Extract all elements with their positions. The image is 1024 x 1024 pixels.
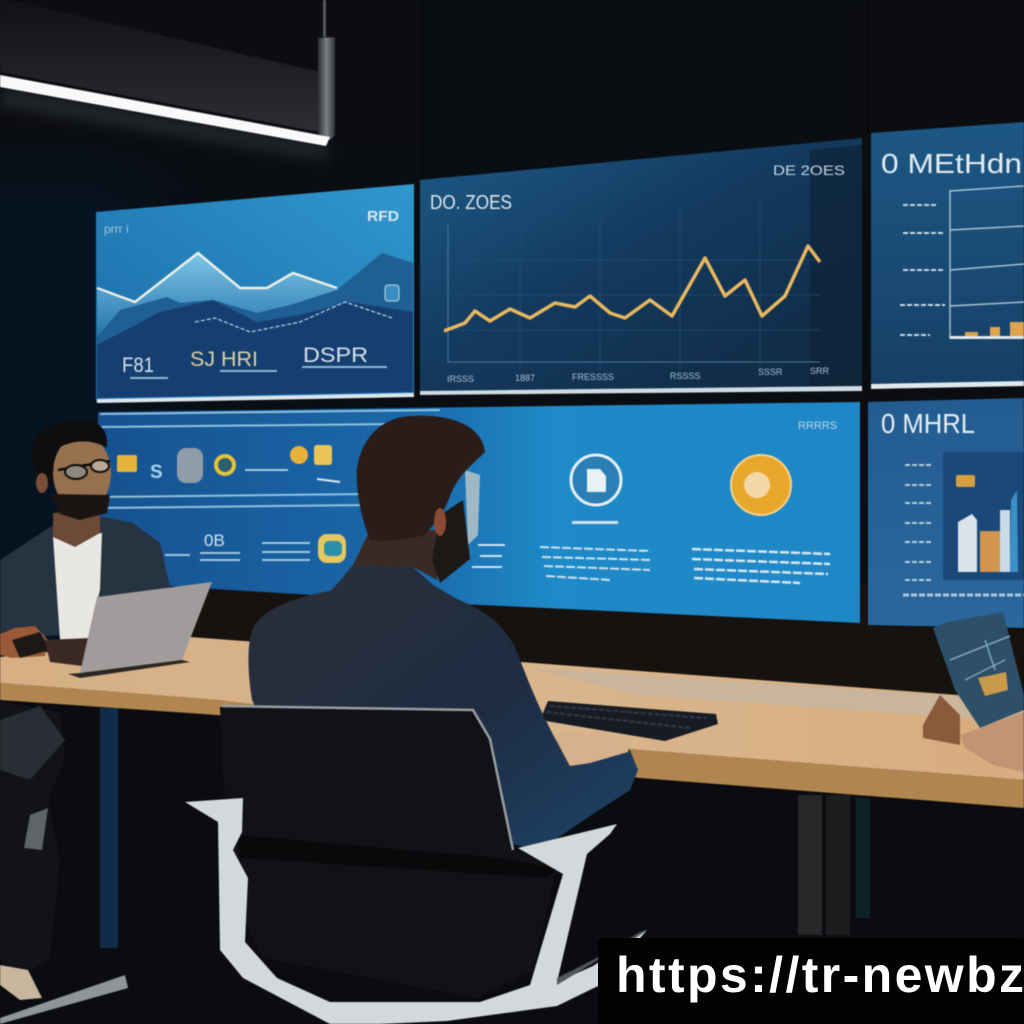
panel: line chart screen: DE 2OES: [773, 162, 845, 178]
chair back: [220, 707, 557, 998]
panel: mountain chart screen: RFD: [367, 208, 399, 225]
beard: [432, 500, 470, 583]
neck: [353, 530, 440, 580]
panel: wide lower screen: [98, 402, 860, 623]
ear: [434, 508, 446, 536]
hands: [923, 695, 960, 745]
legs: [0, 702, 65, 1000]
table legs: [0, 708, 870, 1024]
icon row: S: [150, 462, 163, 483]
head: [32, 420, 111, 547]
panel: line chart screen: SSSR: [758, 367, 783, 377]
panel: mountain chart screen: SJ HRI: [190, 348, 258, 371]
panel: wide lower screen: 0B: [204, 531, 225, 550]
panel: lower right bar screen: [868, 398, 1024, 628]
panel: line chart screen: FRESSSS: [572, 372, 614, 382]
watermark url: https://tr-newbz: [616, 947, 1024, 1003]
panel: line chart screen: RSSSS: [670, 371, 701, 381]
jacket: [0, 517, 170, 640]
person: left analyst: [0, 420, 170, 1000]
mountain range: [97, 253, 337, 345]
panel: line chart screen: [420, 138, 862, 395]
panel: line chart screen: 1887: [515, 373, 535, 383]
hand: [553, 733, 628, 766]
panel: line chart screen: SRR: [810, 366, 830, 376]
icon: gold circle: [731, 455, 791, 515]
panel: mountain chart screen: DSPR: [303, 344, 368, 367]
person: right hands and tablet: [923, 612, 1024, 772]
panel: line chart screen: IRSSS: [447, 374, 474, 384]
laptop: [45, 582, 212, 678]
shirt: [53, 533, 102, 640]
person: centre analyst: [248, 416, 638, 850]
white frame: [185, 798, 647, 1024]
ceiling lamp: [0, 0, 335, 160]
gold line series: [444, 246, 820, 331]
panel: metrics chart screen: 0 MEtHdn: [881, 148, 1022, 179]
watermark url: [598, 938, 1024, 1024]
panel: wide lower screen: RRRRS: [798, 420, 837, 432]
chair: [185, 706, 647, 1024]
hand: [0, 626, 48, 658]
panel: lower right bar screen: 0 MHRL: [881, 408, 975, 439]
torso: [248, 565, 638, 850]
heading: DO. ZOES: [430, 192, 512, 214]
caption bars: [472, 521, 830, 583]
panel: mountain chart screen: F81: [122, 354, 154, 377]
tablet: [933, 612, 1024, 728]
icon: badge circle: [571, 455, 621, 505]
panel: metrics chart screen: [871, 122, 1024, 389]
hair: [357, 416, 485, 541]
face sliver: [465, 470, 480, 545]
desk: [0, 637, 1024, 808]
bar chart: [958, 490, 1018, 572]
keyboard: [540, 701, 718, 741]
panel: mountain chart screen: prrr i: [104, 222, 129, 236]
icon row: [117, 445, 340, 483]
panel: mountain chart screen: [96, 184, 414, 403]
